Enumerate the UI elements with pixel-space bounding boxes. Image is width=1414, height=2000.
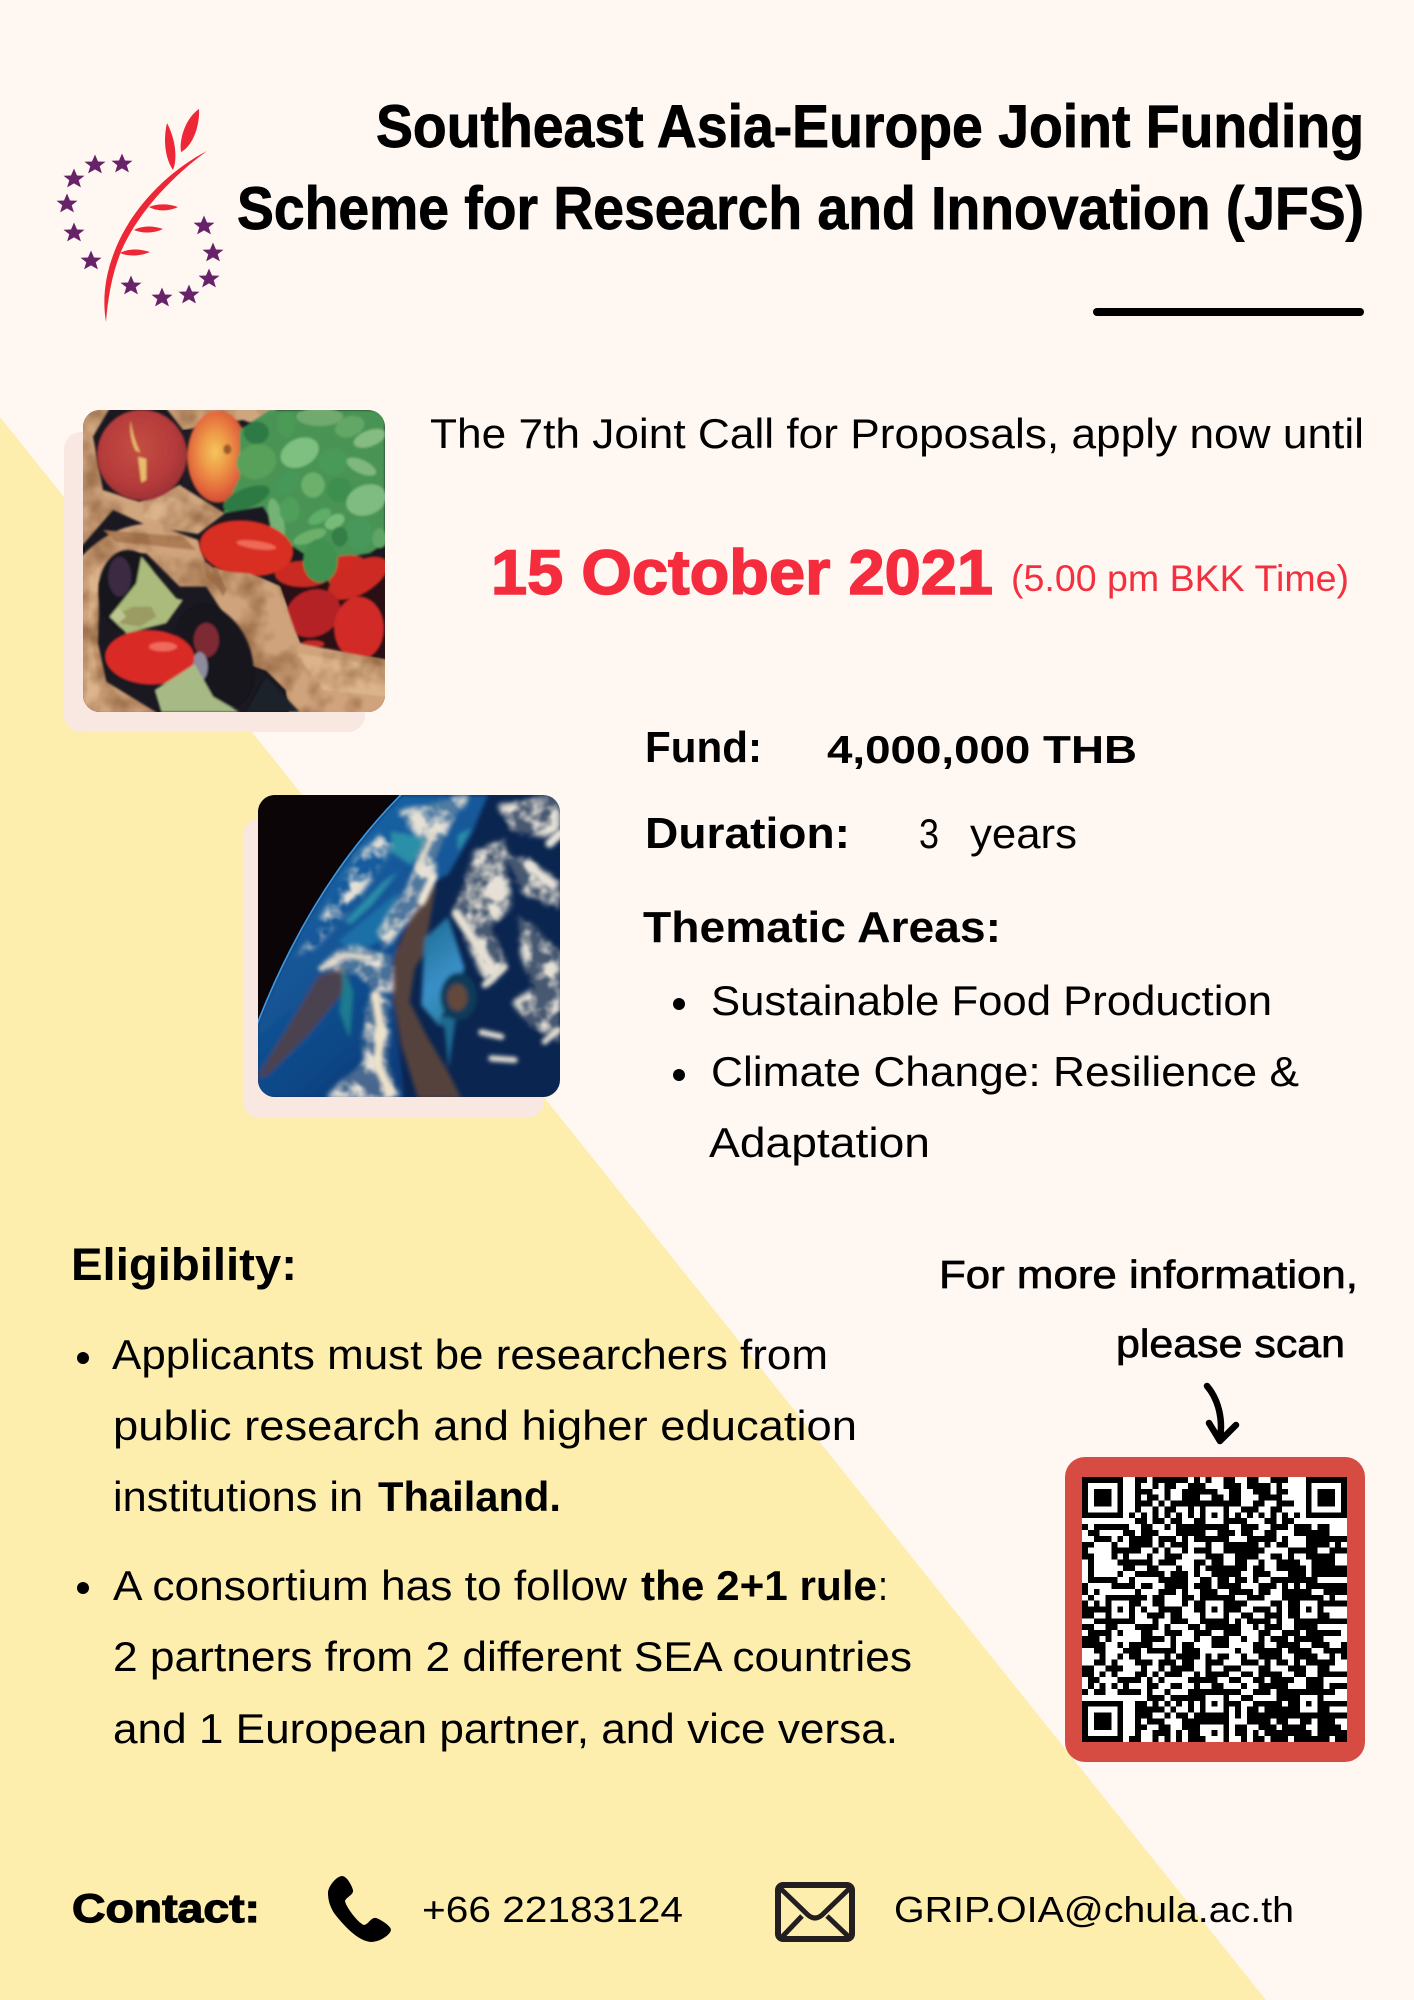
eligibility item two: the 2+1 rule	[641, 1562, 877, 1609]
eligibility item two: A consortium has to follow	[113, 1562, 628, 1609]
contact row	[72, 1876, 1294, 1942]
call intro text: The 7th Joint Call for Proposals, apply now until	[430, 410, 1364, 457]
scan prompt: please scan	[1116, 1323, 1345, 1366]
fund: 4,000,000 THB	[827, 729, 1137, 772]
thematic areas	[643, 903, 1299, 1166]
thematic item two: Climate Change: Resilience &	[711, 1048, 1299, 1095]
fund	[645, 723, 1137, 772]
thematic item two	[673, 1048, 1299, 1166]
eligibility item two: :	[878, 1562, 888, 1609]
background yellow triangle	[0, 417, 1266, 2000]
cloud texture	[298, 793, 560, 1098]
eligibility heading: Eligibility:	[71, 1239, 297, 1290]
eligibility	[71, 1239, 912, 1752]
eligibility item two: and 1 European partner, and vice versa.	[113, 1705, 898, 1752]
earth photo shadow	[243, 819, 544, 1118]
food photo shadow	[64, 432, 365, 732]
title rule	[1093, 308, 1364, 316]
duration: 3	[919, 810, 939, 857]
icon: envelope	[778, 1885, 852, 1939]
deadline time: (5.00 pm BKK Time)	[1011, 558, 1349, 599]
scan prompt	[939, 1254, 1358, 1366]
contact label: Contact:	[72, 1887, 260, 1931]
title	[237, 93, 1364, 242]
QR code	[1082, 1477, 1347, 1742]
photo card: food	[64, 407, 395, 732]
logo plant	[104, 109, 207, 322]
photo card: earth	[243, 793, 562, 1118]
eligibility item one: public research and higher education	[113, 1402, 857, 1449]
QR code card	[1065, 1457, 1365, 1762]
thematic item two: Adaptation	[709, 1119, 930, 1166]
duration	[645, 809, 1077, 858]
thematic item one: Sustainable Food Production	[711, 977, 1272, 1024]
eligibility item one: Thailand.	[378, 1473, 561, 1520]
icon: phone	[328, 1876, 391, 1942]
duration: Duration:	[645, 809, 850, 858]
soft cloud base	[318, 793, 560, 1098]
phone number: +66 22183124	[422, 1889, 683, 1930]
fund: Fund:	[645, 723, 762, 772]
QR frame	[1065, 1457, 1365, 1762]
email address: GRIP.OIA@chula.ac.th	[894, 1889, 1294, 1930]
arrow to QR code	[1207, 1386, 1236, 1441]
scan prompt: For more information,	[939, 1254, 1358, 1297]
eligibility item one: Applicants must be researchers from	[112, 1331, 828, 1378]
food photo	[81, 407, 395, 720]
deadline date: 15 October 2021	[491, 538, 993, 608]
thematic heading: Thematic Areas:	[643, 903, 1001, 952]
duration: years	[970, 810, 1077, 857]
eligibility item two: 2 partners from 2 different SEA countries	[113, 1633, 912, 1680]
eligibility item one	[77, 1331, 857, 1520]
logo	[56, 109, 223, 322]
logo stars	[56, 154, 223, 306]
earth photo	[256, 793, 562, 1099]
deadline	[491, 538, 1349, 608]
eligibility item one: institutions in	[113, 1473, 363, 1520]
eligibility item two	[77, 1562, 912, 1752]
